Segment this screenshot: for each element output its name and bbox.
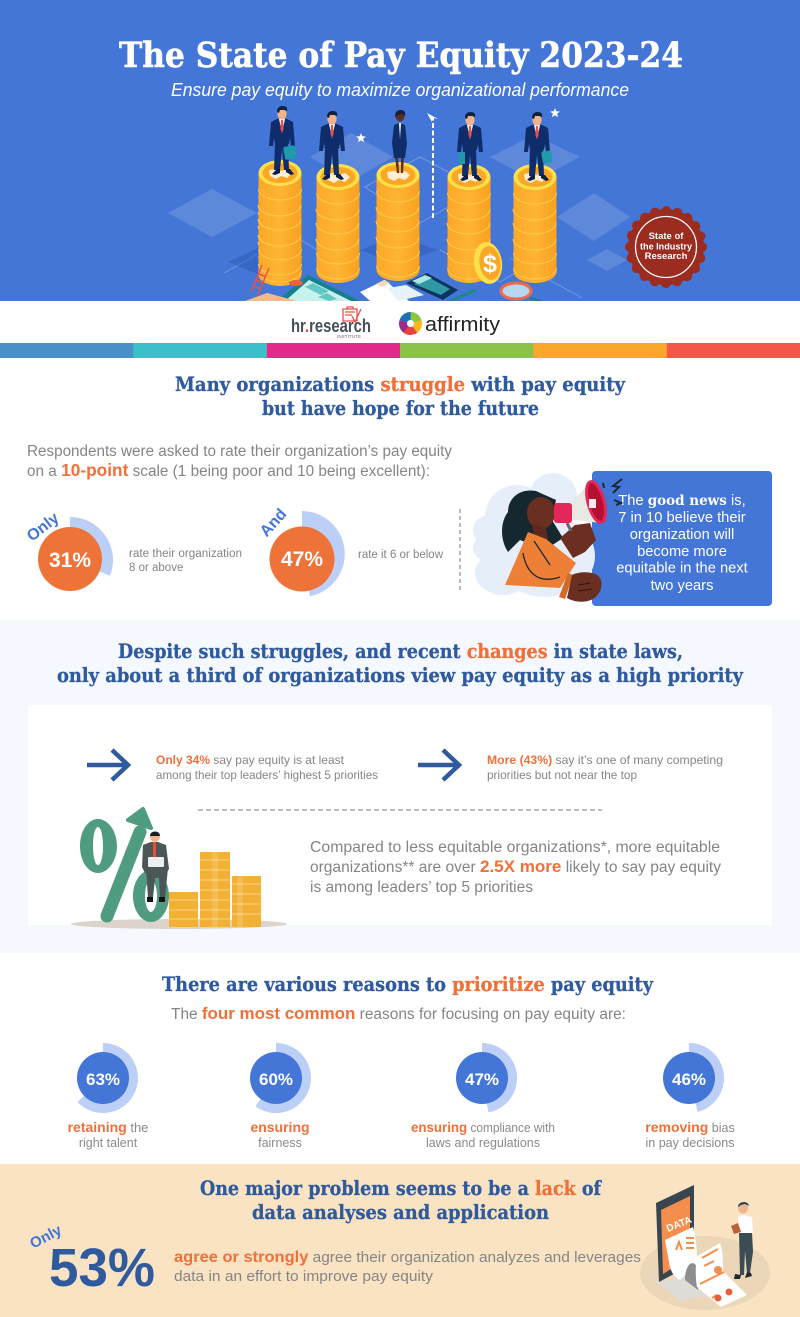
- illustration: phone with data report: [640, 1185, 770, 1310]
- heading: struggle with pay equity: but have hope for the future: [262, 396, 539, 420]
- callout: good news: 7 in 10 believe their: [618, 510, 746, 526]
- chart: 63 percent retaining talent: right talent: [79, 1136, 138, 1150]
- colour band: [0, 343, 800, 358]
- chart: 63 percent retaining talent: retaining the: [68, 1119, 148, 1135]
- callout: good news: equitable in the next: [616, 560, 748, 576]
- text: only 34 percent: [156, 753, 378, 782]
- text: rate 8 or above: [129, 548, 242, 574]
- chart: 60 percent fairness: [250, 1043, 311, 1150]
- heading: lack of data: [200, 1176, 602, 1224]
- icon: arrow one: [87, 750, 128, 780]
- title: The State of Pay Equity 2023-24: [119, 35, 683, 76]
- heading: priority: Despite such struggles, and recent changes in state laws,: [118, 639, 683, 663]
- text: 2.5X comparison: organizations** are over 2.5X more likely to say pay equity: [310, 857, 721, 876]
- coins: three stacks: [169, 852, 261, 927]
- chart: 47 percent compliance: 47%: [465, 1070, 499, 1089]
- chart: 47 percent compliance: ensuring compliance with: [411, 1119, 555, 1135]
- illustration: woman with megaphone: [473, 473, 622, 602]
- figure: man with laptop: [142, 832, 169, 902]
- chart: 31 percent donut: Only: [24, 510, 63, 545]
- text: 2.5X comparison: Compared to less equitable organizations*, more equitable: [310, 839, 720, 856]
- logo: affirmity: affirmity: [425, 314, 500, 336]
- heading: struggle with pay equity: [175, 372, 626, 420]
- chart: 47 percent compliance: [411, 1043, 555, 1150]
- callout: good news: organization will: [630, 527, 734, 543]
- text: analyzes data: data in an effort to improve pay equity: [174, 1268, 434, 1285]
- chart: 63 percent retaining talent: [68, 1043, 148, 1150]
- panel: priority section: [0, 620, 800, 953]
- badge: state of the industry research: Research: [645, 251, 688, 262]
- heading: priority: [57, 639, 744, 687]
- label: only: Only: [27, 1221, 65, 1252]
- illustration: percent sign with coins: [71, 809, 287, 929]
- text: more 43 percent: [487, 753, 723, 782]
- badge: state of the industry research: State of: [649, 231, 684, 242]
- chart: 46 percent removing bias: in pay decisions: [646, 1136, 734, 1150]
- logo: hr.research institute: INSTITUTE: [337, 334, 361, 339]
- chart: 31 percent donut: 31%: [49, 549, 91, 572]
- text: survey description: Respondents were asked to rate their organization’s pay equity: [27, 443, 452, 460]
- text: survey description: on a 10-point scale (1 being poor and 10 being excellent):: [27, 460, 430, 480]
- chart: 60 percent fairness: 60%: [259, 1070, 293, 1089]
- logo: hr.research institute: [291, 307, 371, 339]
- chart: 31 percent donut: [24, 510, 113, 591]
- hero background: [0, 0, 800, 301]
- text: rate 8 or above: rate their organization: [129, 548, 242, 560]
- text: 2.5X comparison: [310, 839, 721, 896]
- icon: pencil: [450, 290, 476, 301]
- chart: 46 percent removing bias: removing bias: [645, 1119, 735, 1135]
- chart: 47 percent donut: [257, 506, 345, 596]
- chart: 60 percent fairness: ensuring: [250, 1119, 310, 1135]
- logo: affirmity: [400, 313, 500, 336]
- chart: 46 percent removing bias: [645, 1043, 735, 1150]
- heading: lack of data: One major problem seems to be a lack of: [200, 1176, 602, 1200]
- icon: papers: [360, 280, 424, 301]
- text: analyzes data: agree or strongly agree their organization analyzes and leverages: [174, 1249, 641, 1266]
- text: analyzes data: [174, 1249, 641, 1285]
- logo strip: [0, 301, 800, 343]
- heading: struggle with pay equity: Many organizations struggle with pay equity: [175, 372, 626, 396]
- badge: state of the industry research: [628, 209, 704, 285]
- text: only 34 percent: among their top leaders’ highest 5 priorities: [156, 768, 378, 782]
- text: more 43 percent: More (43%) say it’s one of many competing: [487, 753, 723, 767]
- icon: arrow two: [418, 750, 459, 780]
- callout: good news: The good news is,: [618, 493, 746, 509]
- woman figure: [392, 110, 407, 173]
- text: rate 8 or above: 8 or above: [129, 562, 183, 574]
- chart: 46 percent removing bias: 46%: [672, 1070, 706, 1089]
- illustration: coin stacks with business people: [245, 106, 560, 301]
- icon: upward dashed arrow: [427, 113, 438, 218]
- icon: magnifier: [501, 283, 540, 301]
- callout: good news: become more: [637, 544, 727, 560]
- heading: lack of data: data analyses and application: [252, 1200, 549, 1224]
- text: four most common: The four most common reasons for focusing on pay equity are:: [171, 1004, 626, 1023]
- text: survey description: [27, 443, 452, 480]
- logo: hr.research institute: hr.research: [291, 316, 371, 336]
- chart: 47 percent donut: 47%: [281, 548, 323, 571]
- chart: 60 percent fairness: fairness: [258, 1136, 302, 1150]
- text: 2.5X comparison: is among leaders’ top 5 priorities: [310, 879, 533, 896]
- figure: woman with clipboard: [731, 1202, 753, 1279]
- text: rate 6 or below: rate it 6 or below: [358, 549, 444, 561]
- icon: stars: [356, 108, 560, 142]
- illustration: phone with data report: DATA: [665, 1215, 694, 1235]
- callout: good news: [592, 471, 772, 606]
- icon: megaphone sound bolts: [603, 479, 622, 505]
- subtitle: Ensure pay equity to maximize organizational performance: [171, 80, 629, 100]
- chart: 63 percent retaining talent: 63%: [86, 1070, 120, 1089]
- icon: ladder: [251, 265, 269, 295]
- stat: 53 percent: 53%: [49, 1238, 155, 1298]
- chart: 47 percent compliance: laws and regulations: [426, 1136, 540, 1150]
- icon: dollar coin: [471, 240, 505, 286]
- panel: white card: [28, 705, 772, 925]
- icon: dollar coin: $: [483, 250, 497, 278]
- callout: good news: two years: [651, 578, 713, 594]
- icon: clipboard: [277, 275, 360, 301]
- text: more 43 percent: priorities but not near the top: [487, 768, 637, 782]
- text: only 34 percent: Only 34% say pay equity is at least: [156, 753, 345, 767]
- badge: state of the industry research: the Industry: [640, 242, 693, 252]
- heading: reasons to prioritize: There are various reasons to prioritize pay equity: [162, 972, 654, 996]
- panel: data analysis section: [0, 1164, 800, 1317]
- chart: 47 percent donut: And: [257, 506, 290, 540]
- icon: calculator: [406, 273, 458, 300]
